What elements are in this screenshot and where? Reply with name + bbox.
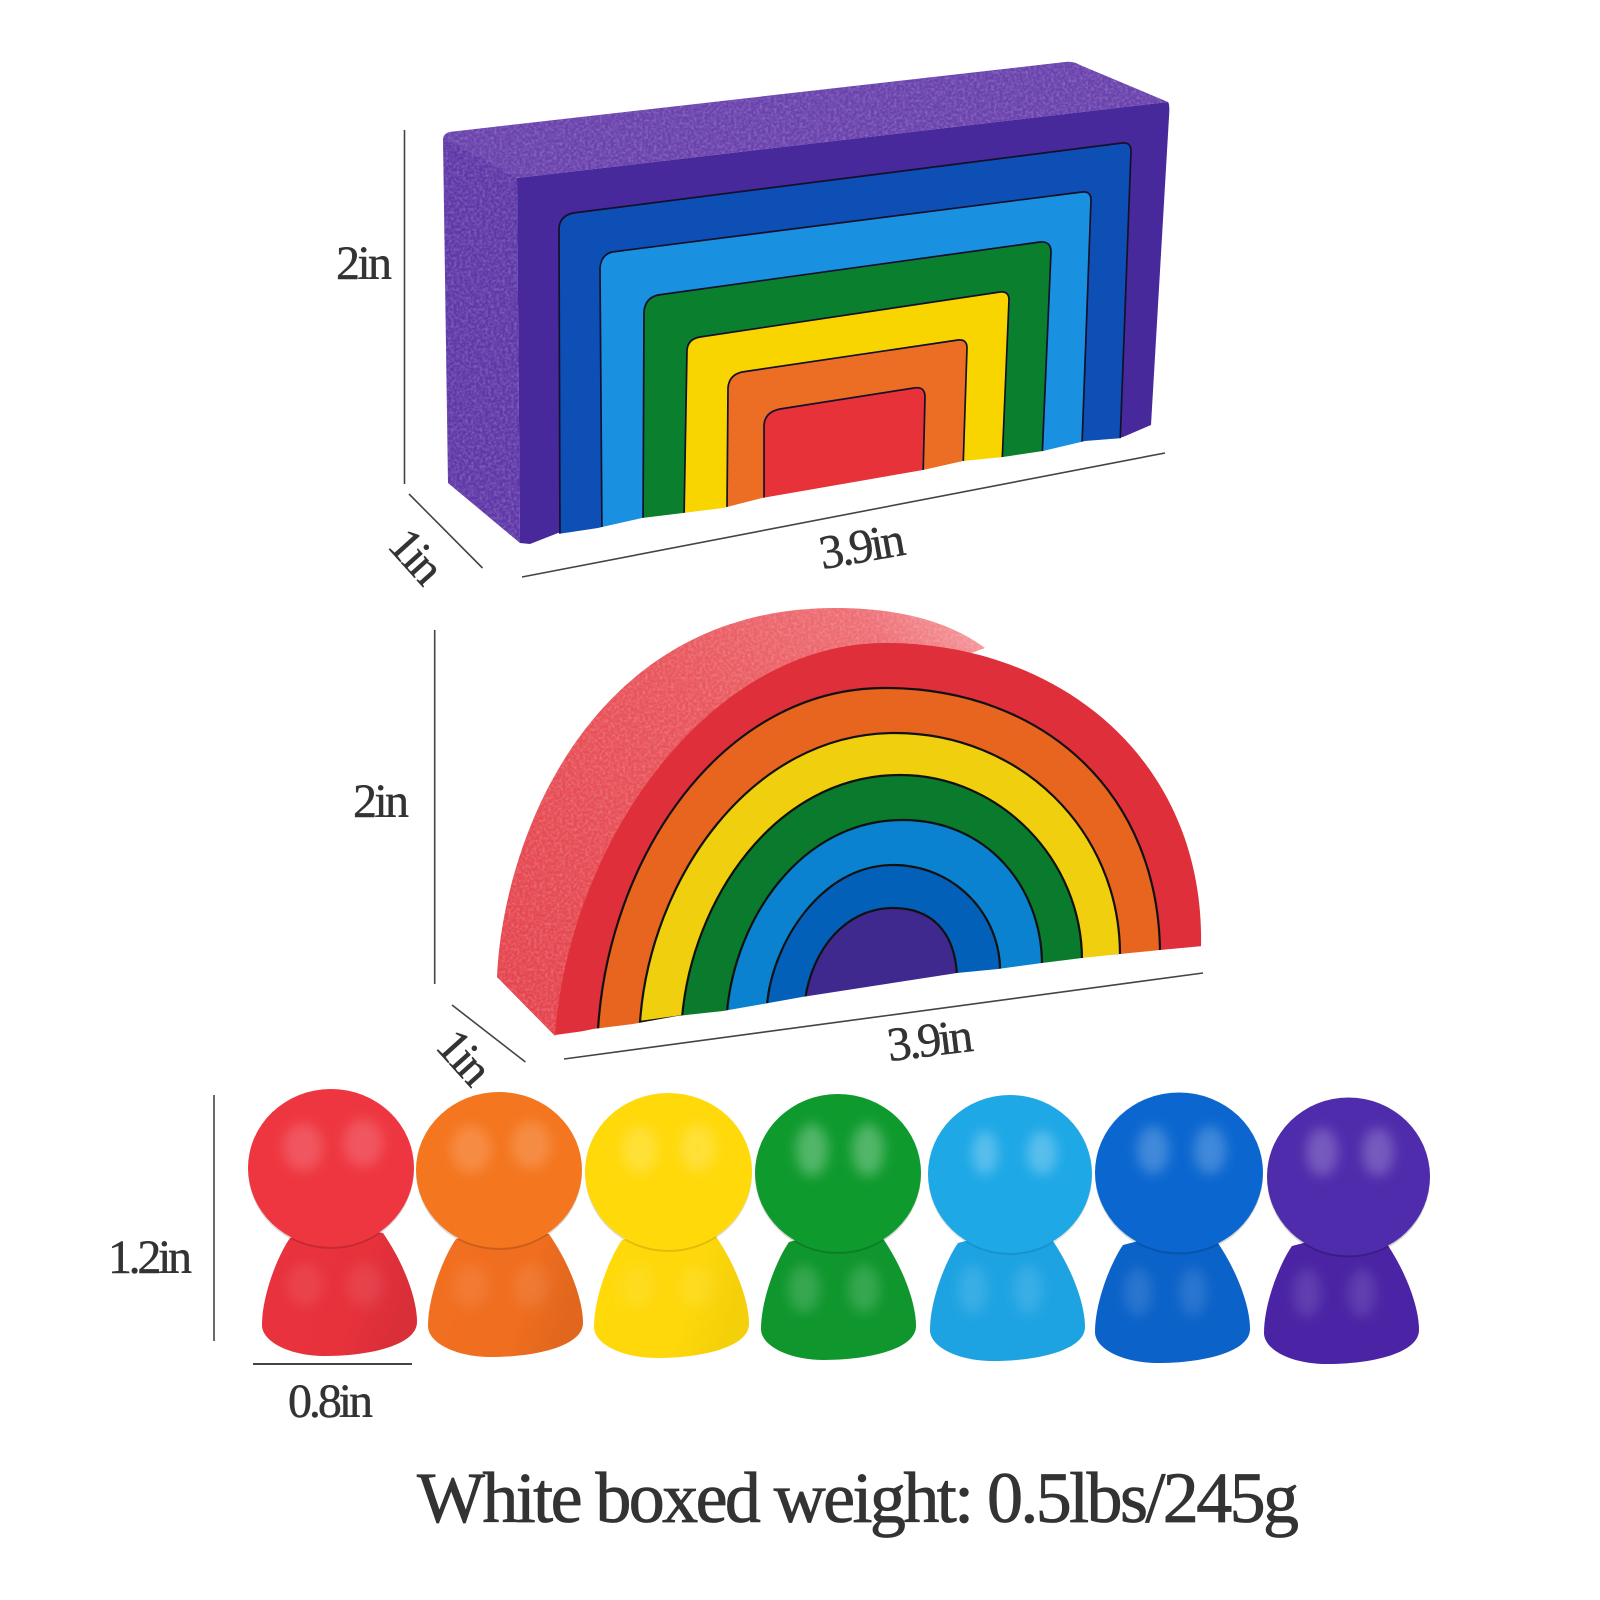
- weight caption: White boxed weight: 0.5lbs/245g: [417, 1458, 1299, 1538]
- arch width line: [564, 973, 1203, 1059]
- red block: [764, 388, 925, 505]
- top face of purple block: [443, 62, 1168, 178]
- label: peg height: 1.2in: [108, 1231, 192, 1284]
- label: arch width: 3.9in: [884, 1009, 976, 1072]
- light blue arch: [600, 192, 1091, 540]
- arch height line: [434, 630, 436, 984]
- red arch: [555, 643, 1201, 1035]
- rectangular stacking arch toy: [443, 62, 1200, 565]
- purple arch: [805, 908, 957, 1000]
- base edge cut: [530, 426, 1200, 565]
- side face of purple block: [443, 138, 520, 543]
- green arch: [643, 242, 1051, 530]
- box depth line: [409, 494, 482, 568]
- dark blue arch: [559, 143, 1131, 545]
- light blue arch: [727, 820, 1042, 1012]
- blue arch: [767, 865, 1000, 1005]
- label: arch height: 2in: [353, 775, 409, 828]
- label: peg width: 0.8in: [288, 1375, 373, 1428]
- orange arch: [598, 688, 1160, 1030]
- yellow arch: [684, 292, 1009, 520]
- red peg: [248, 1089, 417, 1356]
- label: box height: 2in: [336, 237, 392, 290]
- orange arch: [727, 340, 967, 510]
- light blue peg: [928, 1095, 1092, 1361]
- row of peg dolls: [248, 1089, 1430, 1364]
- purple front: [517, 102, 1169, 544]
- peg width line: [253, 1363, 412, 1365]
- green peg: [755, 1094, 921, 1360]
- box width line: [522, 453, 1165, 577]
- purple peg: [1264, 1098, 1430, 1364]
- label: arch depth: 1in: [426, 1019, 503, 1096]
- yellow peg: [585, 1093, 752, 1358]
- yellow arch: [640, 733, 1120, 1022]
- blue peg: [1095, 1092, 1263, 1363]
- rainbow arch toy: [497, 608, 1220, 1050]
- label: box depth: 1in: [378, 518, 455, 595]
- orange peg: [416, 1092, 583, 1357]
- peg height line: [213, 1095, 215, 1341]
- arch depth line: [452, 1005, 525, 1062]
- base edge cut: [555, 946, 1220, 1050]
- box height line: [404, 130, 406, 484]
- arch side face: [497, 608, 985, 1036]
- green arch: [682, 775, 1082, 1018]
- label: box width: 3.9in: [815, 513, 909, 580]
